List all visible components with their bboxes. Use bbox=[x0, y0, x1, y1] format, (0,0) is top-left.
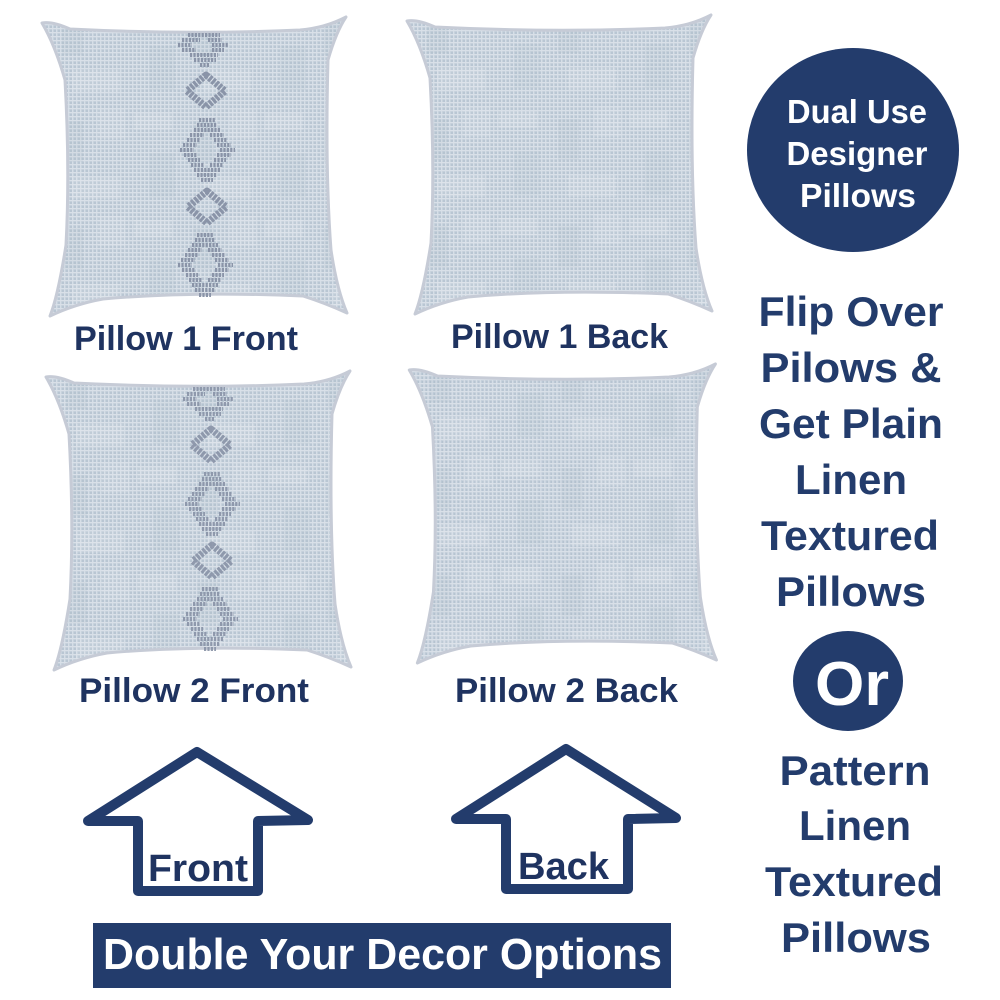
badge: dual use designer pillows: Designer bbox=[786, 135, 928, 172]
text block: flip over: Pilows & bbox=[760, 344, 942, 391]
text block: flip over: Flip Over bbox=[758, 288, 944, 335]
pillow 2 front bbox=[46, 371, 351, 670]
text block: pattern linen: Textured bbox=[765, 858, 943, 905]
pillow 2 back bbox=[409, 364, 716, 663]
text block: flip over: Pillows bbox=[776, 568, 926, 615]
text block: pattern linen: Linen bbox=[799, 802, 911, 849]
pattern motif column bbox=[178, 35, 235, 295]
banner text: Double Your Decor Options bbox=[103, 930, 662, 979]
label: pillow 1 front: Pillow 1 Front bbox=[74, 320, 298, 358]
text block: pattern linen: Pattern bbox=[780, 747, 930, 794]
arrow: front bbox=[88, 752, 308, 891]
label: pillow 2 front: Pillow 2 Front bbox=[79, 672, 309, 710]
pillow 1 back bbox=[407, 15, 712, 314]
text block: flip over: Linen bbox=[795, 456, 907, 503]
label: pillow 1 back: Pillow 1 Back bbox=[451, 318, 668, 356]
arrow label: back: Back bbox=[518, 846, 610, 888]
arrow: back bbox=[456, 749, 676, 889]
badge: dual use designer pillows bbox=[747, 48, 959, 252]
label: pillow 2 back: Pillow 2 Back bbox=[455, 672, 678, 710]
pillow 1 front bbox=[42, 17, 347, 316]
banner bbox=[93, 923, 671, 988]
text block: pattern linen bbox=[765, 747, 943, 961]
badge: or bbox=[793, 631, 903, 731]
text block: flip over bbox=[758, 288, 944, 615]
arrow label: front: Front bbox=[148, 848, 248, 890]
badge: dual use designer pillows: Dual Use bbox=[787, 93, 927, 130]
pattern motif column bbox=[183, 389, 240, 649]
text block: pattern linen: Pillows bbox=[781, 914, 931, 961]
badge: or: Or bbox=[815, 650, 889, 719]
text block: flip over: Get Plain bbox=[759, 400, 943, 447]
badge: dual use designer pillows: Pillows bbox=[800, 177, 916, 214]
text block: flip over: Textured bbox=[761, 512, 939, 559]
